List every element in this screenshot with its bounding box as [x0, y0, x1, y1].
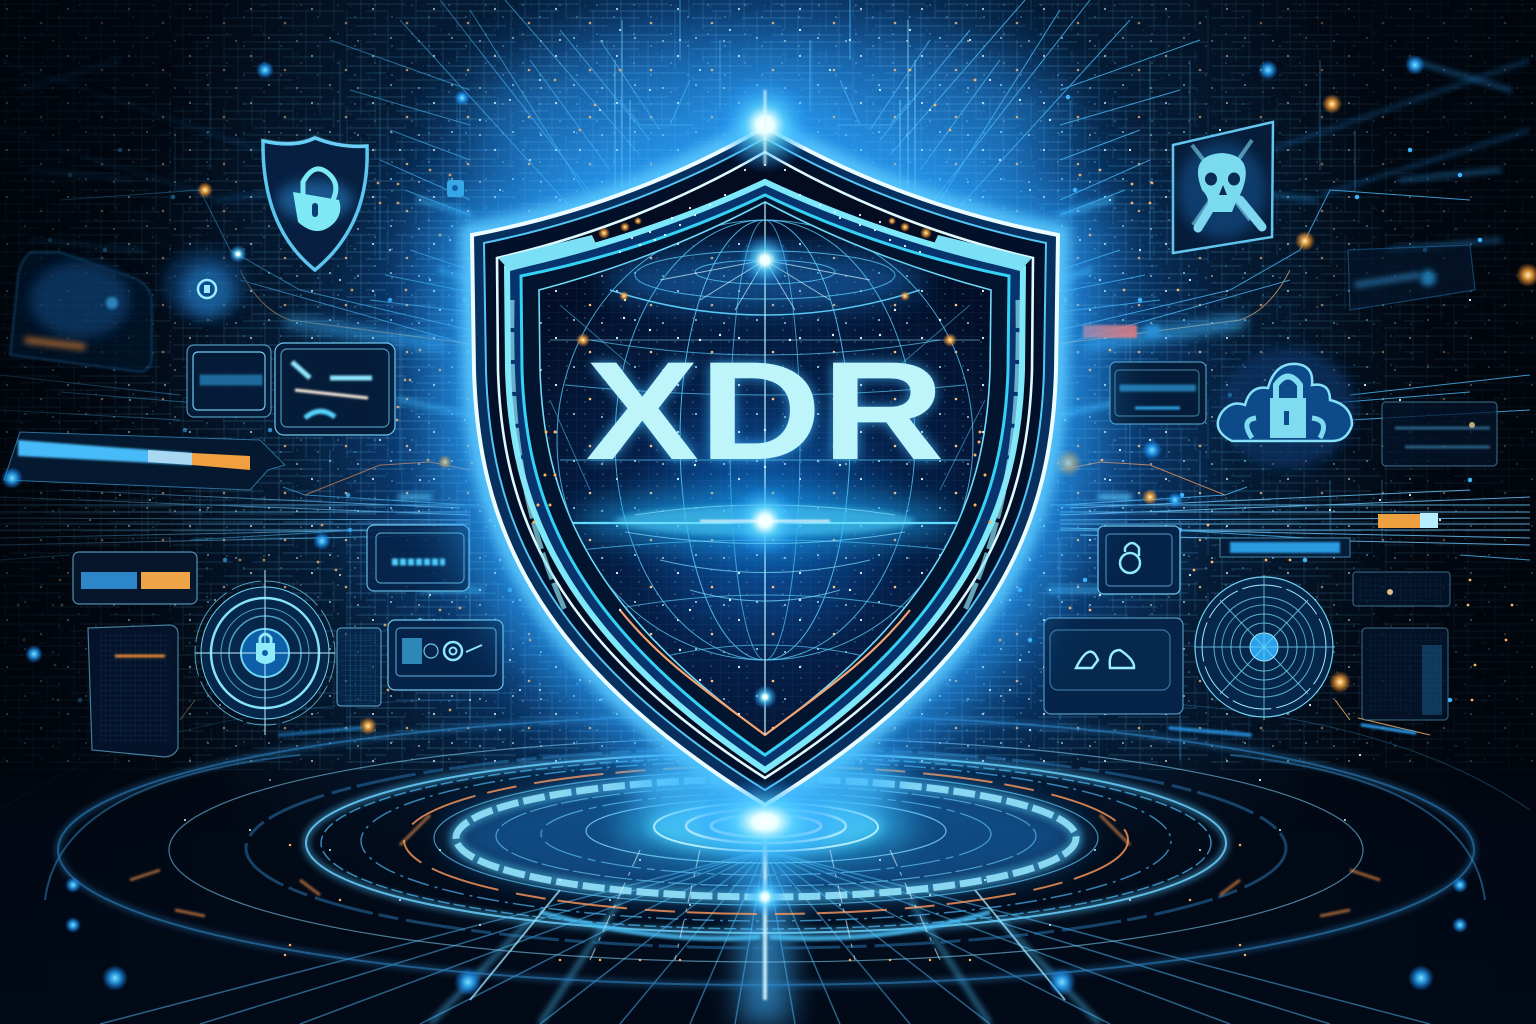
status bar long blue	[1220, 538, 1350, 557]
panel: fingerprint card	[388, 620, 503, 690]
panel: left interface cards	[1, 252, 503, 757]
panel: padlock card	[1098, 526, 1180, 594]
shield inner band	[521, 195, 1009, 755]
icon: radar right	[1195, 575, 1335, 720]
floor: concentric hologram platform	[45, 648, 1485, 1024]
panel: wave text card	[367, 525, 469, 591]
shield cyan band	[507, 182, 1023, 770]
panel: upper blurred card right	[1348, 245, 1475, 310]
panel: card blurred right	[1382, 402, 1497, 466]
glow dots left and right field	[25, 55, 1536, 735]
panel: right interface cards	[1044, 245, 1497, 720]
panel: twin glyph card	[1044, 618, 1183, 714]
top flare	[717, 77, 813, 173]
icon: skull and crossbones card	[1173, 122, 1273, 253]
panel: small grid card	[1353, 572, 1450, 606]
panel: card scan right	[1110, 362, 1206, 424]
status bar pink	[1083, 325, 1160, 338]
shield core stars	[700, 234, 830, 709]
icon: target lock radar	[195, 570, 335, 735]
shield interior sparks	[534, 291, 990, 697]
shoulder plates and lights	[498, 165, 1032, 271]
icon: cloud with padlock	[1218, 348, 1355, 468]
status bar blue and orange	[1, 432, 285, 490]
panel: card waveform	[187, 345, 271, 417]
shield second band	[484, 138, 1046, 790]
shield white rim	[497, 152, 1033, 778]
panel: data grid card	[88, 625, 178, 757]
icon: shield with padlock	[262, 137, 368, 270]
panel: card scan	[275, 343, 395, 435]
shield outer glow	[472, 127, 1058, 840]
floor glow points	[65, 877, 1468, 996]
shield core panel	[539, 202, 991, 735]
circuit lines and data points right	[800, 0, 1530, 810]
panel: blurred orb card	[10, 252, 152, 372]
icon: small lock ring	[163, 249, 247, 321]
background grid texture	[0, 0, 1536, 770]
shield body outer band	[472, 127, 1058, 805]
status bar orange and cyan	[1378, 513, 1438, 528]
bottom flare	[695, 778, 835, 866]
panel: small blue and orange bar card	[73, 552, 197, 604]
panel: mini grid card	[337, 628, 381, 706]
shield inner orange trim	[620, 610, 910, 735]
panel: data grid card right	[1362, 628, 1448, 720]
shield emblem	[472, 77, 1058, 866]
shield globe wireframe	[540, 202, 990, 740]
title XDR: XDR	[586, 332, 944, 489]
shield side strip lights	[512, 300, 1018, 610]
icon: small tile lock left	[447, 180, 464, 197]
circuit lines and data points left	[0, 0, 730, 810]
title XDR: XDR	[586, 332, 944, 489]
